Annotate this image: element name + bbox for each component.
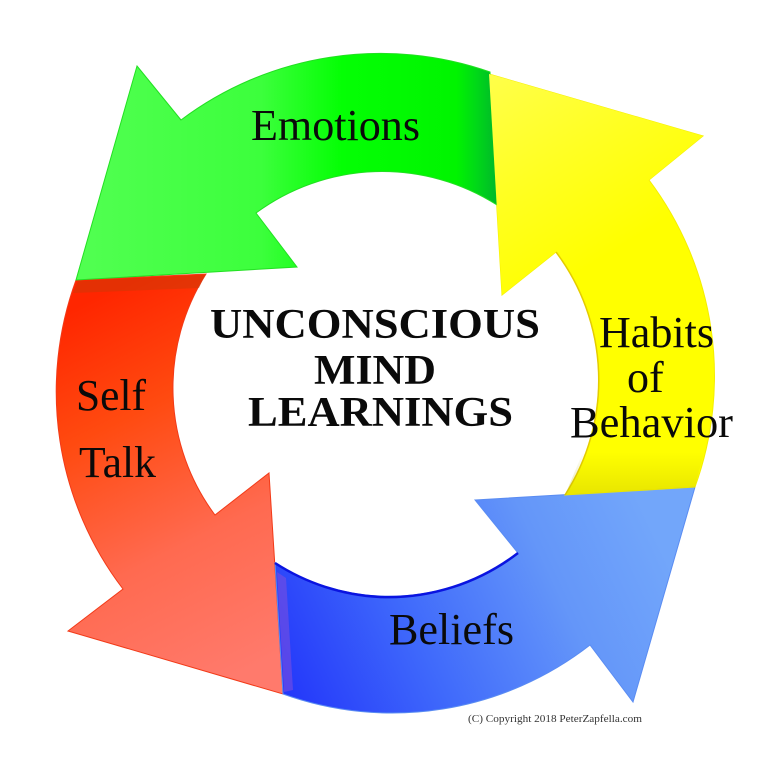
title: Unconscious Mind Learnings — [210, 302, 540, 436]
label: Habits of Behavior — [570, 308, 733, 447]
label: Habits of Behavior: Behavior — [570, 398, 733, 447]
label: Habits of Behavior: of — [627, 353, 664, 402]
label: Emotions: Emotions — [251, 101, 420, 150]
copyright note: (C) Copyright 2018 PeterZapfella.com — [468, 713, 642, 725]
arrow: emotions (green) — [76, 53, 497, 280]
label: Self Talk: Talk — [79, 438, 156, 487]
title: Unconscious Mind Learnings: UNCONSCIOUS — [210, 302, 540, 348]
label: Beliefs: Beliefs — [389, 605, 514, 654]
title: Unconscious Mind Learnings: LEARNINGS — [248, 390, 513, 436]
arrow head: yellow redraw over green — [489, 74, 703, 295]
label: Self Talk — [76, 371, 156, 487]
arrow: beliefs (blue) — [275, 487, 695, 713]
label: Habits of Behavior: Habits — [599, 308, 714, 357]
label: Self Talk: Self — [76, 371, 146, 420]
arrow: habits of behavior (yellow) — [489, 74, 714, 495]
arrow: self talk (red) — [56, 274, 283, 694]
title: Unconscious Mind Learnings: MIND — [314, 348, 436, 394]
